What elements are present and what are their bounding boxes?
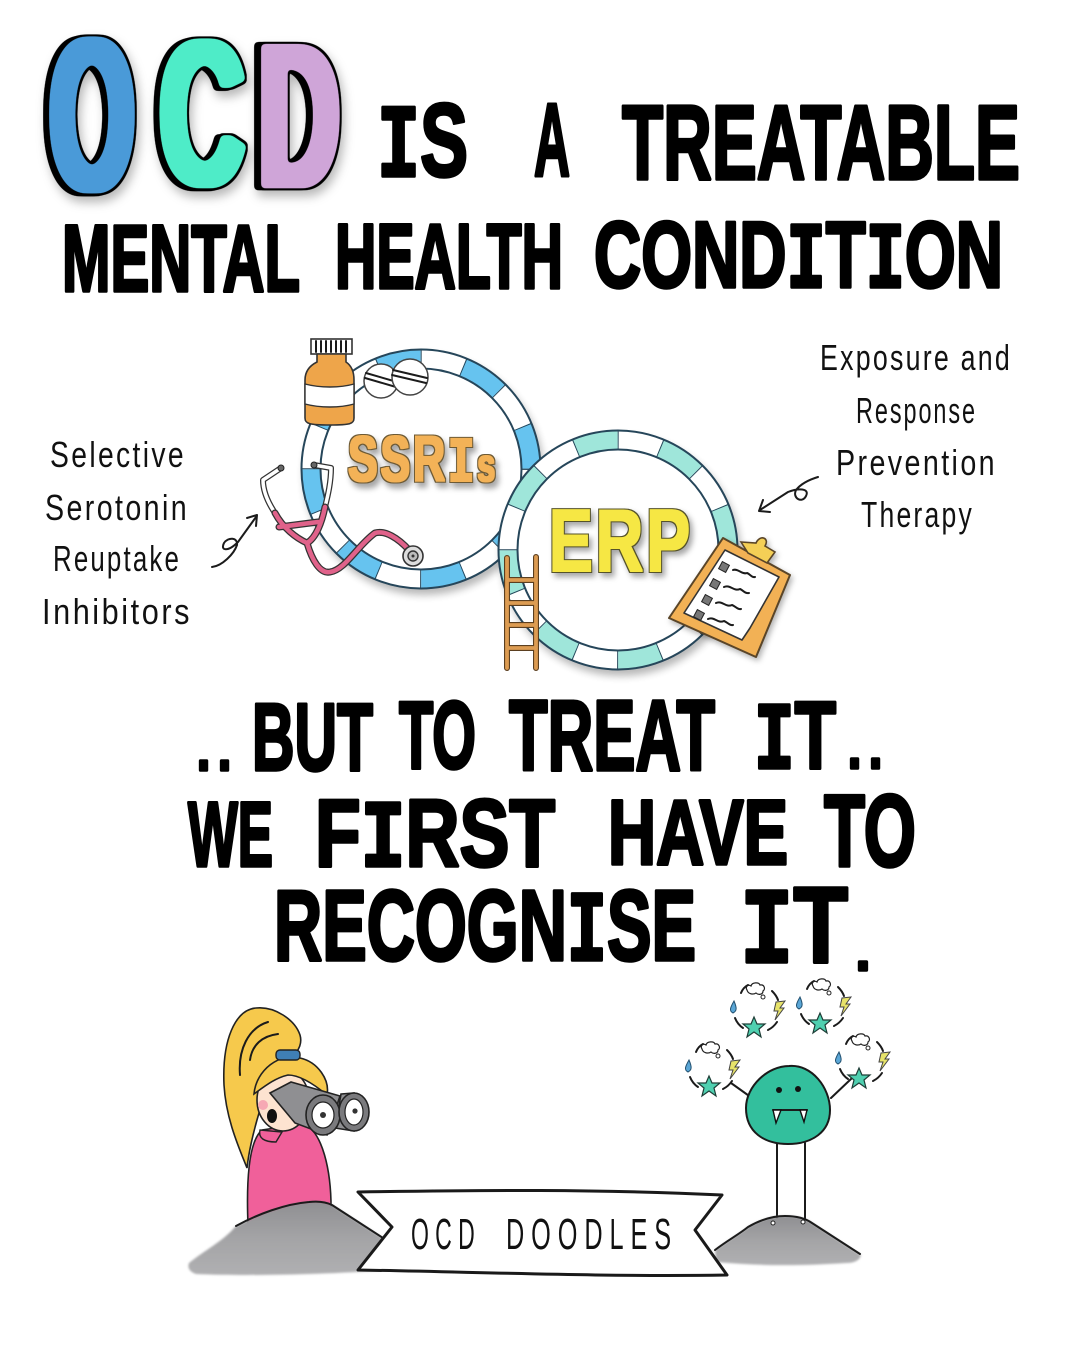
hill [188, 1202, 386, 1275]
icon: clipboard [669, 538, 790, 657]
heading line: mental health condition: CONDITION [594, 202, 1003, 316]
text block: exposure and response prevention therapy: Therapy [861, 494, 974, 535]
legs [777, 1143, 805, 1224]
arrow: to ERP [759, 477, 818, 512]
heading line: mental health condition: HEALTH [335, 206, 563, 308]
OCD coloured letters: C [160, 0, 244, 230]
banner: OCD Doodles [358, 1190, 727, 1275]
arrow: to stethoscope [212, 515, 257, 567]
icon: pill bottle [305, 339, 354, 425]
text block: exposure and response prevention therapy: Response [856, 390, 977, 431]
heading line: is a treatable: A [534, 83, 570, 199]
heading line: mental health condition: MENTAL [62, 206, 300, 312]
OCD coloured letters: D [259, 1, 339, 231]
icon: pills [364, 359, 428, 398]
heading: but to treat it, we first have to recognise it: IT [740, 864, 848, 995]
banner: OCD Doodles: OCD [411, 1210, 481, 1259]
text block: selective serotonin reuptake inhibitors: Inhibitors [42, 591, 192, 632]
SSRIs label: SSRIs [348, 423, 498, 501]
text block: selective serotonin reuptake inhibitors: Serotonin [45, 487, 189, 528]
text block: exposure and response prevention therapy [820, 337, 1012, 535]
heading: but to treat it, we first have to recognise it: WE [188, 784, 273, 886]
heading: but to treat it, we first have to recognise it: TREAT [509, 680, 715, 792]
banner: OCD Doodles: DOODLES [506, 1210, 678, 1259]
hill [715, 1216, 861, 1265]
heading: but to treat it, we first have to recognise it [188, 680, 916, 995]
arms [731, 1079, 851, 1098]
collar [260, 1130, 282, 1142]
heading: but to treat it, we first have to recognise it: . [856, 922, 870, 982]
OCD coloured letters: O [50, 0, 134, 237]
OCD coloured letters [50, 0, 339, 237]
ponytail [224, 1008, 301, 1168]
face [254, 1050, 327, 1131]
title [50, 0, 1020, 316]
icon: ladder [507, 557, 536, 668]
text block: exposure and response prevention therapy: Exposure and [820, 337, 1012, 378]
heading line: mental health condition [62, 202, 1003, 316]
heading: but to treat it, we first have to recognise it: .. [848, 714, 890, 781]
heading: but to treat it, we first have to recognise it: .. [197, 716, 239, 783]
heading line: is a treatable [377, 83, 1020, 208]
heading: but to treat it, we first have to recognise it: IT [754, 682, 836, 797]
heading line: is a treatable: IS [377, 83, 468, 208]
heading: but to treat it, we first have to recognise it: BUT [252, 684, 373, 791]
icon: stethoscope [263, 462, 423, 572]
treatment diagram [212, 339, 818, 670]
icon: thought cycle 4 [835, 1034, 890, 1088]
illustration: girl with binoculars on a hill [188, 1008, 386, 1275]
heading: but to treat it, we first have to recognise it: FIRST [315, 780, 555, 895]
icon: thought cycle 1 [730, 983, 785, 1037]
text block: selective serotonin reuptake inhibitors: Selective [50, 434, 186, 475]
heading: but to treat it, we first have to recognise it: HAVE [608, 782, 788, 884]
ERP label: ERP [549, 491, 693, 590]
heading: but to treat it, we first have to recognise it: TO [399, 682, 476, 789]
monster face [773, 1086, 807, 1123]
illustration: monster juggling thoughts on a hill [685, 979, 890, 1265]
heading: but to treat it, we first have to recognise it: RECOGNISE [274, 870, 696, 991]
text block: exposure and response prevention therapy: Prevention [836, 442, 997, 483]
monster body [746, 1066, 830, 1144]
panel: ERP ring [498, 430, 738, 670]
icon: thought cycle 3 [685, 1042, 740, 1096]
panel: SSRIs ring [302, 350, 540, 588]
binoculars [270, 1082, 369, 1135]
icon: thought cycle 2 [796, 979, 851, 1033]
dress [248, 1124, 331, 1225]
heading: but to treat it, we first have to recognise it: TO [824, 774, 916, 888]
text block: selective serotonin reuptake inhibitors [42, 434, 192, 632]
text block: selective serotonin reuptake inhibitors: Reuptake [53, 538, 181, 579]
